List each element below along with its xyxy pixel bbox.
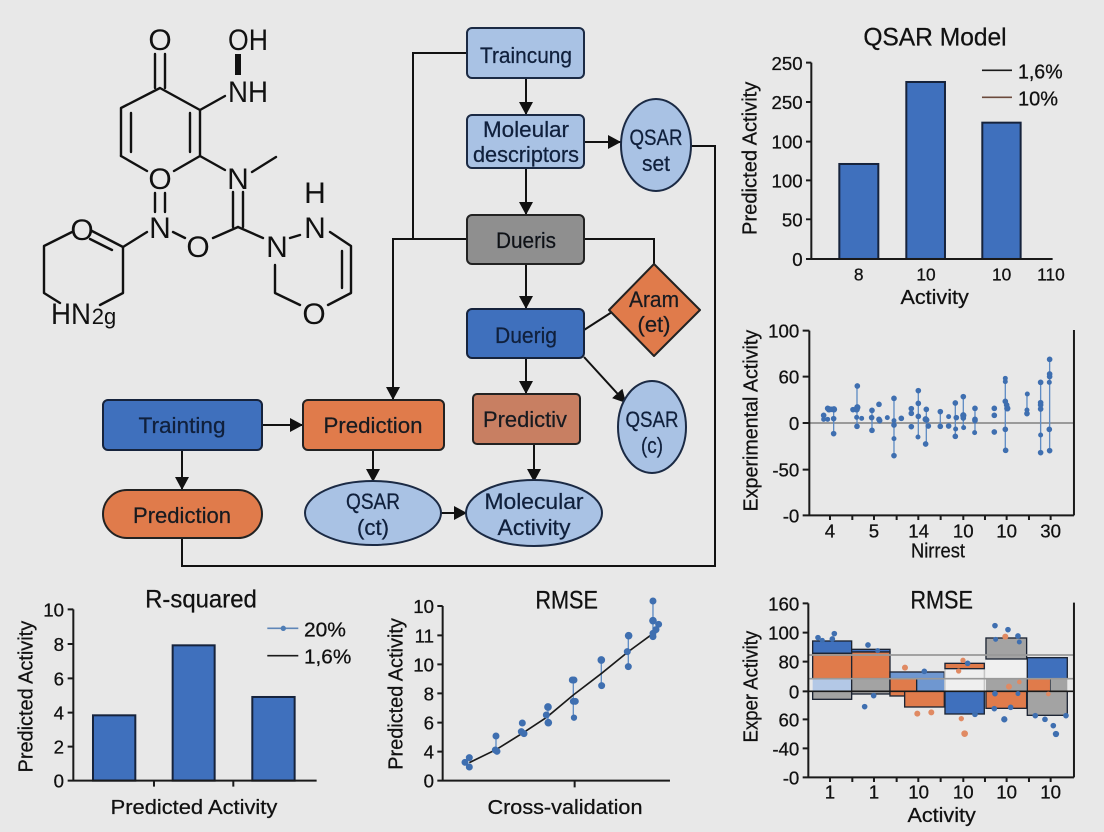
y tick labels <box>768 593 799 788</box>
axes <box>803 603 1074 782</box>
molecular structure: O <box>148 24 172 57</box>
zero line <box>809 420 1074 426</box>
chart title: R-squared <box>145 585 257 613</box>
x axis label: Nirrest <box>911 540 965 563</box>
x tick labels: 10 <box>908 782 929 803</box>
node: Prediction <box>303 400 444 450</box>
legend: 10% <box>1018 88 1058 110</box>
error bars <box>496 601 653 751</box>
node: Trainting <box>103 400 262 450</box>
node: QSAR (c) <box>618 381 686 473</box>
x axis label: Predicted Activity <box>111 796 278 819</box>
y tick labels: 100 <box>772 132 803 153</box>
y tick labels <box>43 600 64 792</box>
x tick labels: 1 <box>869 782 879 803</box>
node: QSAR (c): (c) <box>641 433 663 458</box>
y tick labels: 0 <box>789 413 799 434</box>
y axis label: Predicted Activity <box>385 618 408 770</box>
node: Molecular Activity <box>466 480 602 546</box>
y tick labels: 2 <box>54 737 64 758</box>
node: Prediction pill <box>103 490 262 538</box>
chart: QSAR Model bars <box>739 24 1065 309</box>
molecular structure: O <box>70 214 94 247</box>
axes <box>803 330 1074 520</box>
y tick labels: 10 <box>413 654 434 675</box>
molecular structure: 2g <box>92 304 116 329</box>
node: QSAR set: set <box>642 151 670 176</box>
error bars <box>834 359 1050 456</box>
node: Prediction: Prediction <box>324 413 422 438</box>
molecular structure: O <box>148 163 172 196</box>
y tick labels: 100 <box>772 170 803 191</box>
y tick labels: 8 <box>424 683 434 704</box>
y axis label: Exper Activity <box>739 630 762 742</box>
x tick labels: 110 <box>1037 265 1065 285</box>
node: Moleular descriptors <box>467 115 584 168</box>
molecular structure: N <box>227 163 249 196</box>
molecular structure: NH <box>228 76 268 109</box>
node: Trainting: Trainting <box>138 413 226 438</box>
y axis label: Predicted Activity <box>739 81 762 235</box>
x tick labels: 10 <box>996 520 1017 541</box>
blue data points <box>816 623 1068 737</box>
y tick labels: 60 <box>779 709 799 730</box>
x tick labels <box>825 782 1061 803</box>
node: QSAR (c): QSAR <box>626 407 678 432</box>
x tick labels: 10 <box>992 265 1011 285</box>
chart: R-squared bars <box>15 585 351 819</box>
node: Duerig: Duerig <box>495 323 557 348</box>
y tick labels <box>413 596 434 792</box>
y tick labels: 250 <box>772 53 803 74</box>
y tick labels: 4 <box>424 742 434 763</box>
node: Predictiv: Predictiv <box>483 407 567 432</box>
chart: RMSE scatter with trend line <box>385 586 670 819</box>
orange data points <box>902 634 1050 737</box>
node: Dueris: Dueris <box>496 228 556 253</box>
legend: 1,6% <box>304 645 351 668</box>
y tick labels: 10 <box>413 596 434 617</box>
x tick labels: 8 <box>854 265 863 285</box>
x tick labels: 10 <box>953 782 974 803</box>
y tick labels: 100 <box>768 321 799 342</box>
legend: 1,6% <box>1018 62 1063 84</box>
y tick labels: 0 <box>424 771 434 792</box>
node: Molecular Activity: Molecular <box>484 489 584 514</box>
node: Prediction pill: Prediction <box>133 503 231 528</box>
y tick labels: 0 <box>792 249 803 270</box>
y tick labels <box>772 53 803 270</box>
node: Traincung <box>467 28 584 78</box>
y tick labels: 6 <box>54 668 64 689</box>
y tick labels: 11 <box>415 625 434 646</box>
bars <box>839 82 1021 259</box>
x tick labels: 10 <box>953 520 974 541</box>
node: QSAR set <box>621 99 691 191</box>
y tick labels: 8 <box>54 634 64 655</box>
node: Moleular descriptors: descriptors <box>473 142 579 167</box>
node: Aram (et) <box>609 264 700 356</box>
y tick labels: 80 <box>779 652 799 673</box>
molecular structure: N <box>266 231 288 264</box>
x tick labels: 10 <box>996 782 1017 803</box>
node: Predictiv <box>473 394 580 444</box>
molecular structure: N <box>304 212 326 245</box>
connector lines <box>182 53 715 566</box>
node: Aram (et): (et) <box>638 312 670 337</box>
x tick labels <box>854 265 1065 285</box>
y axis label: Experimental Activity <box>739 329 762 511</box>
chart: RMSE stacked bars <box>739 586 1074 827</box>
molecular structure: HN <box>51 298 91 331</box>
chart title: RMSE <box>535 586 598 614</box>
y tick labels: 0 <box>54 771 64 792</box>
x tick labels: 10 <box>916 265 936 285</box>
x tick labels <box>825 520 1061 541</box>
y tick labels: 4 <box>54 703 64 724</box>
x tick labels: 1 <box>825 782 835 803</box>
axes <box>806 63 1053 259</box>
x axis label: Activity <box>900 286 970 309</box>
y tick labels: 10 <box>43 600 64 621</box>
legend: 20% <box>304 619 346 642</box>
y axis label: Predicted Activity <box>15 620 38 772</box>
node: Traincung: Traincung <box>480 43 572 68</box>
node: Aram (et): Aram <box>629 287 679 312</box>
y tick labels: 6 <box>424 713 434 734</box>
chart title: RMSE <box>910 586 973 614</box>
node: QSAR (ct): QSAR <box>346 489 400 514</box>
molecular structure: O <box>186 231 210 264</box>
molecular structure: N <box>149 212 171 245</box>
y tick labels: 100 <box>768 623 799 644</box>
x tick labels: 4 <box>825 520 835 541</box>
y tick labels: 0 <box>789 681 799 702</box>
y tick labels: 250 <box>772 92 803 113</box>
molecular structure: OH <box>228 24 268 57</box>
molecular structure: H <box>304 177 326 210</box>
node: Moleular descriptors: Moleular <box>483 117 569 142</box>
legend <box>267 619 351 668</box>
node: Duerig <box>467 309 584 358</box>
reference lines <box>808 655 1074 679</box>
x tick labels: 14 <box>908 520 929 541</box>
axes <box>437 606 670 787</box>
chart: experimental activity scatter <box>739 321 1074 563</box>
bars <box>93 645 295 781</box>
x tick labels: 30 <box>1040 520 1061 541</box>
y tick labels: 60 <box>779 367 799 388</box>
node: Dueris <box>467 215 584 264</box>
x tick labels: 5 <box>869 520 879 541</box>
y tick labels: -0 <box>783 505 799 526</box>
node: QSAR (ct) <box>305 481 441 545</box>
node: QSAR set: QSAR <box>630 125 682 150</box>
y tick labels: 50 <box>782 209 803 230</box>
x axis label: Activity <box>907 804 977 827</box>
axes <box>68 609 317 787</box>
y tick labels: -0 <box>783 767 799 788</box>
y tick labels: -50 <box>772 460 799 481</box>
chart title: QSAR Model <box>863 24 1007 52</box>
molecular structure: O <box>302 298 326 331</box>
legend <box>982 62 1063 110</box>
y tick labels <box>768 321 799 526</box>
y tick labels: 160 <box>768 593 799 614</box>
x axis label: Cross-validation <box>487 796 642 819</box>
data points <box>821 357 1052 458</box>
molecular structure <box>44 24 351 331</box>
stacked bars <box>813 638 1067 715</box>
flowchart <box>103 28 715 566</box>
y tick labels: -40 <box>772 738 799 759</box>
x tick labels: 10 <box>1040 782 1061 803</box>
data points <box>462 598 662 770</box>
trend line <box>469 633 653 763</box>
node: Molecular Activity: Activity <box>498 515 570 540</box>
node: QSAR (ct): (ct) <box>357 515 389 540</box>
